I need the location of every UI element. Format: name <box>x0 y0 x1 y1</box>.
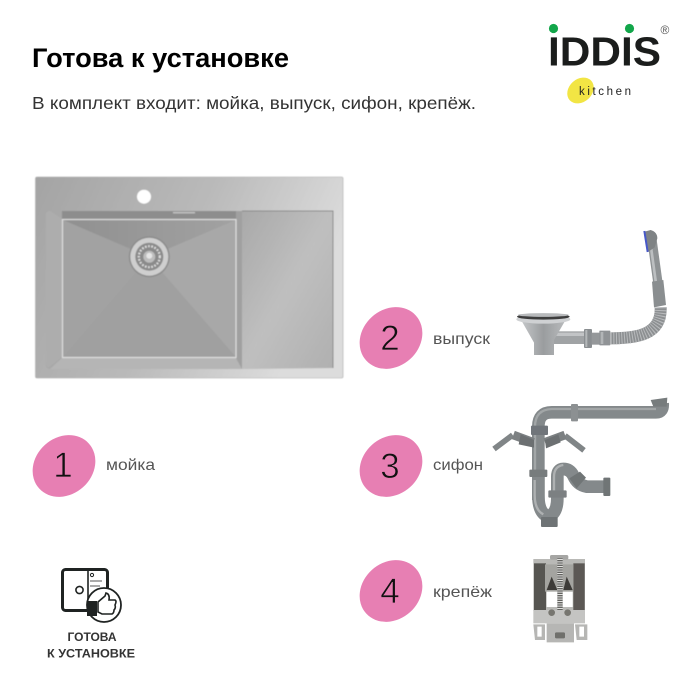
item 3: сифон <box>347 422 483 510</box>
logo green dot left <box>549 24 558 33</box>
icon sink outline <box>62 570 108 610</box>
item 2: выпуск <box>347 294 491 382</box>
icon caption line 2: К УСТАНОВКЕ <box>47 646 135 660</box>
badge 4 <box>347 547 435 635</box>
bowl floor facets <box>63 220 236 257</box>
image: drain outlet with overflow hose <box>516 230 666 355</box>
item 4: крепёж <box>347 547 492 635</box>
number 2: 2 <box>380 319 400 358</box>
siphon collars <box>531 426 548 435</box>
logo kitchen word: kitchen <box>579 86 631 98</box>
drain strainer <box>129 236 170 277</box>
icon caption line 1: ГОТОВА <box>68 630 117 644</box>
logo registered mark: ® <box>660 23 670 37</box>
logo wordmark: IDDIS <box>548 28 661 74</box>
logo green dot right <box>625 24 634 33</box>
image: mounting clip <box>533 555 587 642</box>
icon: ready to install <box>47 570 135 660</box>
tap hole <box>137 190 151 204</box>
number 4: 4 <box>380 572 400 611</box>
icon thumbs up circle <box>87 588 121 622</box>
drainboard <box>242 211 333 369</box>
number 3: 3 <box>380 447 400 486</box>
badge 1 <box>20 422 108 510</box>
sink top plate <box>36 177 343 378</box>
bowl surround <box>46 211 242 369</box>
number 1: 1 <box>53 446 73 485</box>
siphon trap <box>538 469 606 517</box>
sink photo <box>36 177 343 378</box>
icon thumbs up <box>87 593 116 616</box>
icon drain ring <box>76 586 83 594</box>
badge 2 <box>347 294 435 382</box>
item 1: мойка <box>20 422 155 510</box>
badge 3 <box>347 422 435 510</box>
bowl inner edge highlight <box>62 220 236 358</box>
subtitle: kit contents: В комплект входит: мойка, выпуск, сифон, крепёж. <box>32 93 476 113</box>
label мойка: мойка <box>106 457 155 474</box>
overflow slot <box>173 212 195 213</box>
image: siphon <box>494 398 667 527</box>
logo yellow blob <box>562 72 599 109</box>
logo: IDDIS kitchen <box>548 23 670 109</box>
label выпуск: выпуск <box>433 331 491 348</box>
title: Готова к установке <box>32 43 289 73</box>
icon drainboard marks <box>90 573 94 577</box>
siphon side branches <box>494 435 584 450</box>
siphon main pipe <box>538 403 663 500</box>
label сифон: сифон <box>433 457 483 474</box>
label крепёж: крепёж <box>433 584 492 601</box>
